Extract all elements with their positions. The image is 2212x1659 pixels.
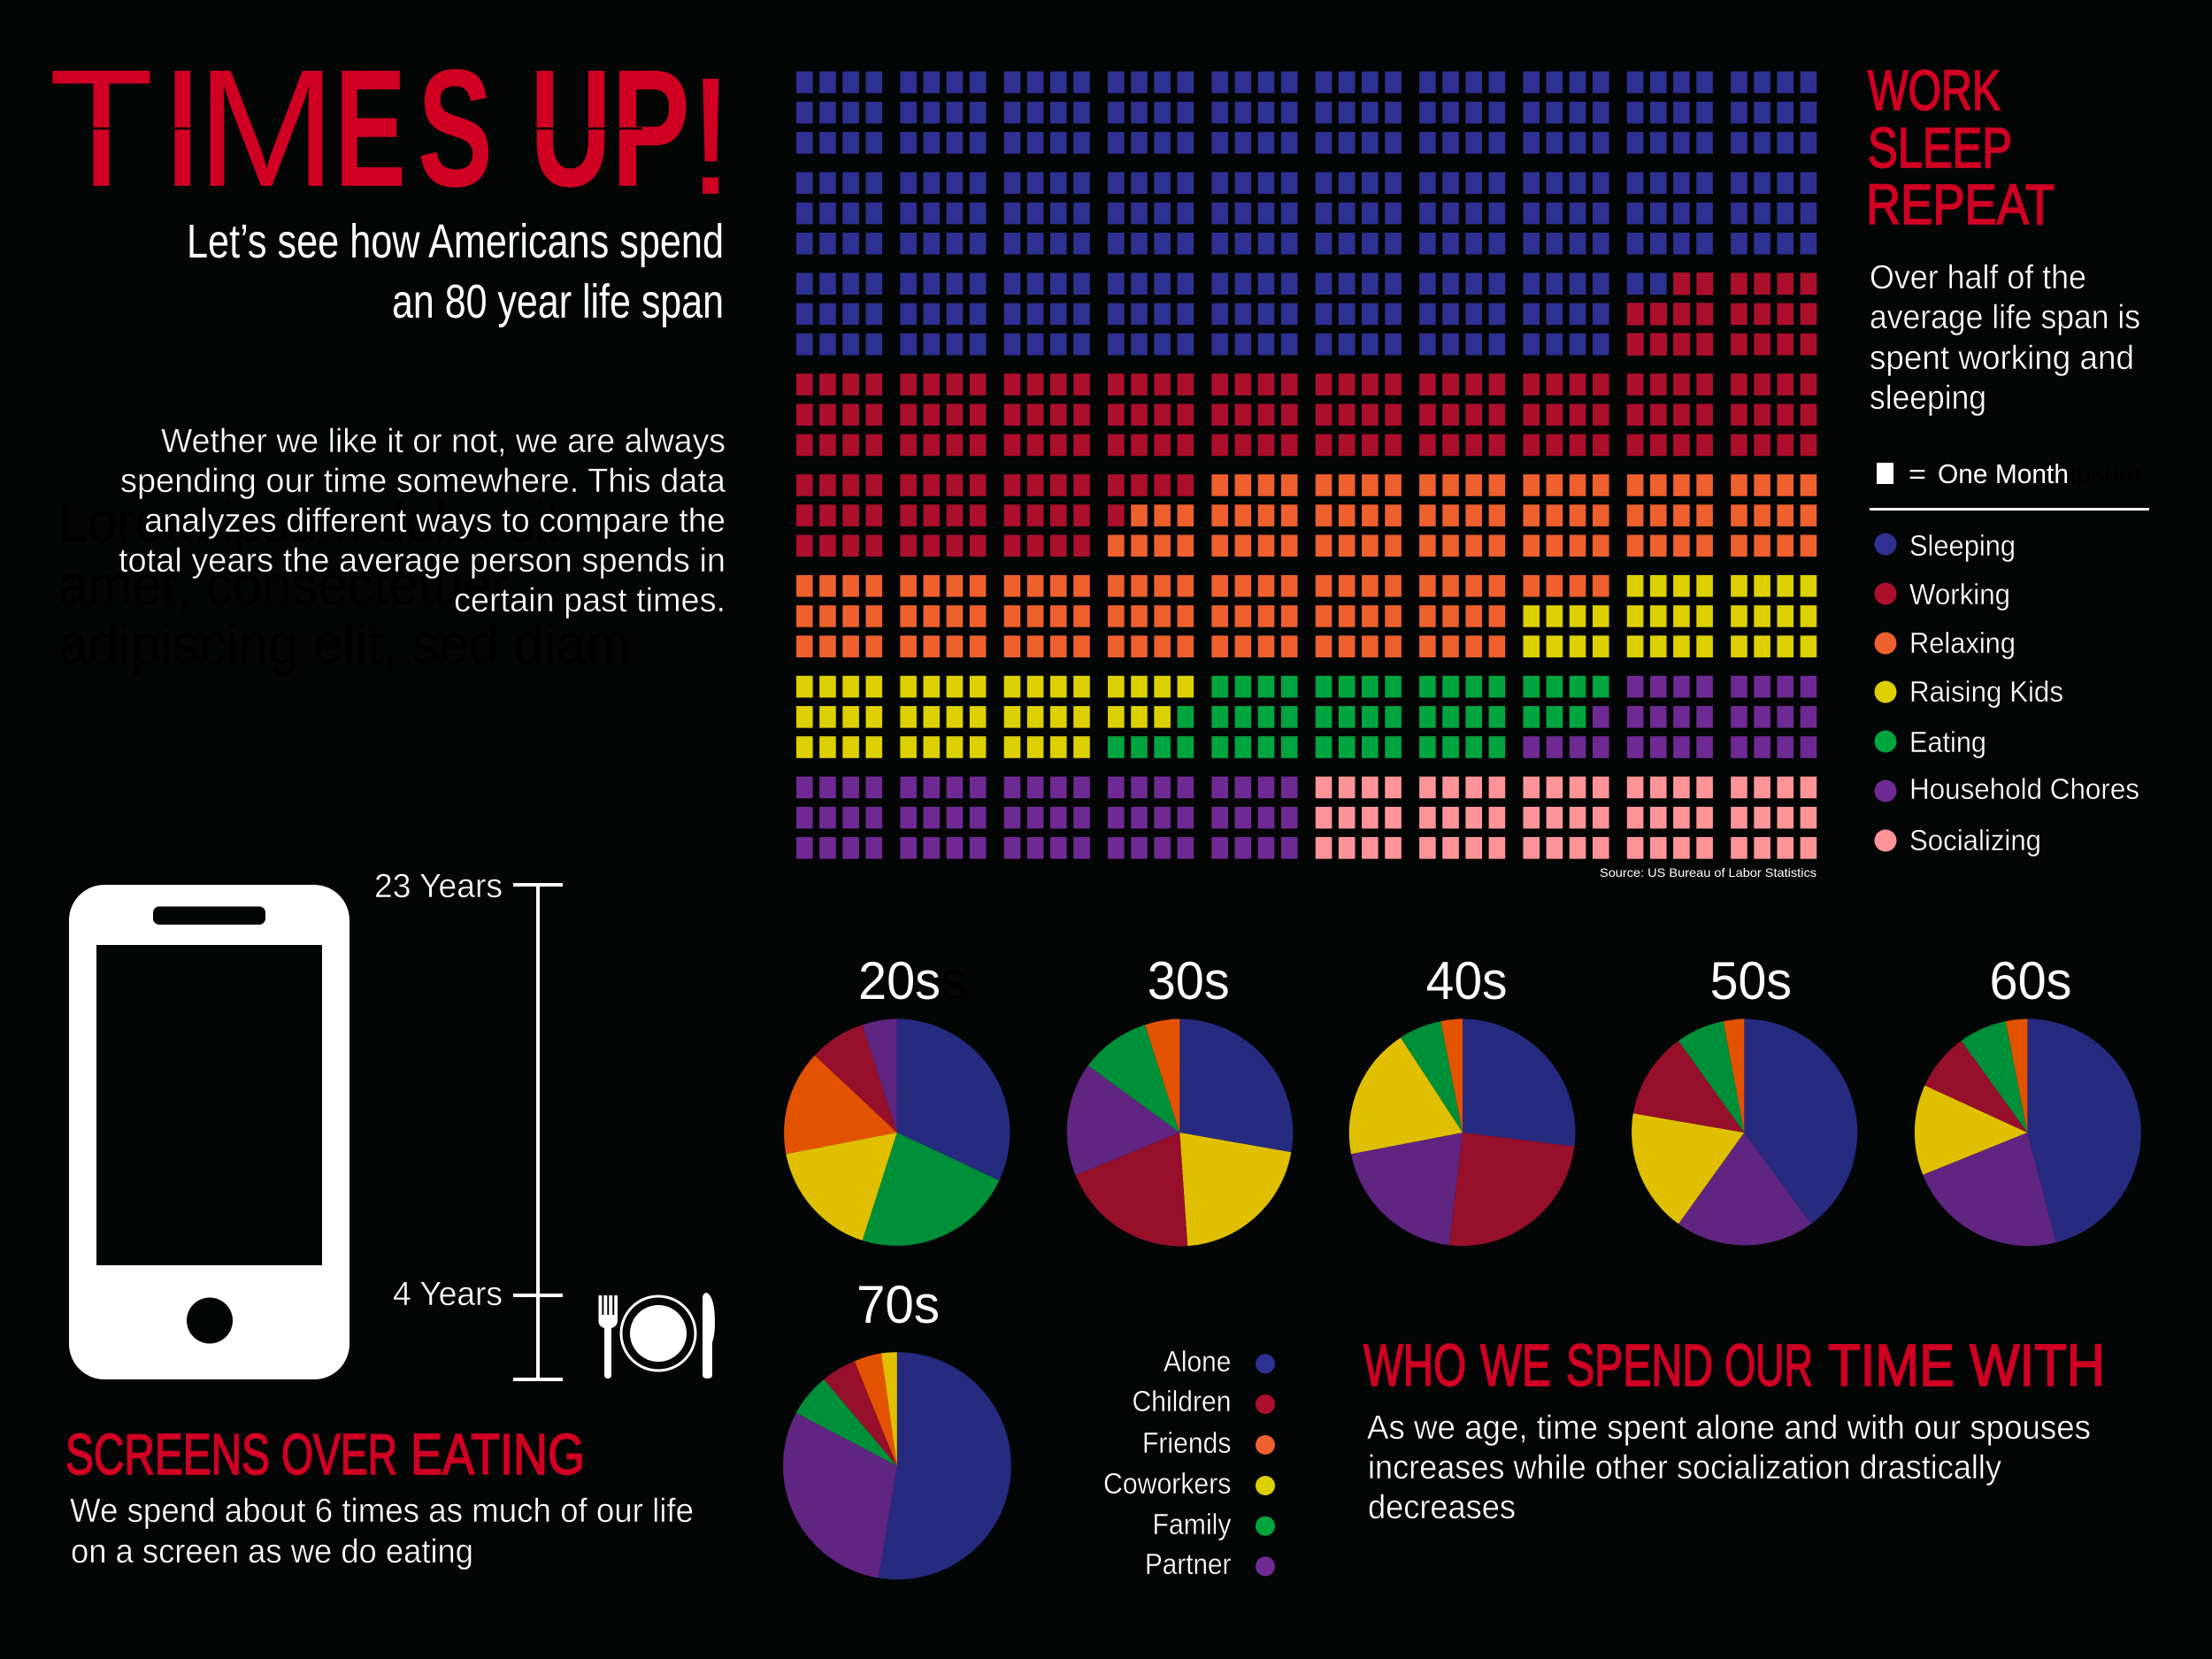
heading: work sleep repeat: WORK	[1868, 58, 2001, 122]
unit key: one month: =	[1909, 458, 1926, 489]
heading: screens over eating: OVER	[281, 1422, 397, 1486]
waffle chart: 80 years in months	[796, 72, 1816, 859]
heading: who we spend our time with: TIME	[1828, 1333, 1955, 1399]
heading: work sleep repeat: REPEAT	[1866, 173, 2055, 236]
work sleep repeat text: sleeping	[1870, 380, 1986, 417]
ghost placeholder text: Lorem ipsum dolor sit	[58, 490, 560, 554]
pie chart: 60s	[1915, 951, 2141, 1246]
screens over eating text: on a screen as we do eating	[71, 1533, 473, 1571]
heading: who we spend our time with: SPEND	[1566, 1333, 1713, 1399]
heading: who we spend our time with: WE	[1480, 1333, 1551, 1399]
legend: activities: Household Chores	[1909, 772, 2139, 805]
subtitle: Let’s see how Americans spend	[187, 215, 724, 268]
legend: people: Family	[1152, 1508, 1232, 1540]
heading: screens over eating	[65, 1422, 585, 1486]
title: P	[611, 35, 690, 222]
pie chart: 50s	[1632, 951, 1857, 1245]
heading: work sleep repeat	[1866, 58, 2055, 236]
legend: people	[1103, 1345, 1275, 1580]
pie chart: 40s: 40s	[1426, 951, 1508, 1010]
pie chart: 20s: s	[941, 951, 967, 1010]
who we spend time with text: As we age, time spent alone and with our spouses	[1367, 1409, 2091, 1447]
pie chart: 30s: 30s	[1148, 951, 1230, 1010]
title: U	[530, 35, 611, 222]
pie chart: 50s: 50s	[1710, 951, 1792, 1010]
title: S	[418, 35, 493, 222]
source note: Source: US Bureau of Labor Statistics	[1600, 865, 1816, 879]
work sleep repeat text	[1870, 259, 2140, 417]
intro paragraph: analyzes different ways to compare the	[144, 503, 726, 540]
scale bar: screen vs eating years: 4 Years	[393, 1276, 503, 1313]
legend: activities: Relaxing	[1909, 626, 2016, 659]
pie chart: 30s	[1067, 951, 1293, 1247]
pie chart: 20s	[784, 951, 1010, 1246]
eating cells	[1108, 676, 1609, 758]
legend: people: Coworkers	[1103, 1467, 1231, 1500]
pie chart: 20s: 20s	[858, 951, 941, 1010]
subtitle: an 80 year life span	[392, 275, 724, 328]
legend: activities: Eating	[1909, 726, 1986, 758]
title: M	[196, 35, 336, 222]
working cells	[796, 273, 1816, 557]
legend: activities: Working	[1909, 578, 2010, 611]
who we spend time with text: increases while other socialization drastically	[1368, 1449, 2001, 1486]
legend: activities: Sleeping	[1909, 529, 2016, 562]
heading: who we spend our time with: WITH	[1970, 1333, 2105, 1399]
work sleep repeat text: Over half of the	[1870, 259, 2086, 296]
unit key: one month: One Month	[1938, 458, 2069, 489]
heading: screens over eating: EATING	[411, 1422, 585, 1486]
title: !	[687, 43, 734, 230]
screens over eating text	[70, 1493, 694, 1571]
title: T	[49, 35, 154, 222]
heading: who we spend our time with: WHO	[1363, 1333, 1466, 1399]
pie chart: 60s: 60s	[1989, 951, 2072, 1010]
sleeping cells	[796, 72, 1816, 355]
legend: activities: Socializing	[1909, 824, 2041, 856]
intro paragraph	[119, 423, 726, 619]
who we spend time with text: decreases	[1368, 1489, 1516, 1526]
scale bar: screen vs eating years	[374, 868, 563, 1381]
icon: smartphone	[69, 885, 349, 1379]
legend: activities	[1874, 529, 2139, 856]
heading: who we spend our time with	[1363, 1333, 2105, 1399]
title: E	[334, 35, 406, 222]
title	[49, 35, 734, 230]
pie chart: 70s: 70s	[856, 1275, 940, 1334]
scale bar: screen vs eating years: 23 Years	[374, 868, 503, 905]
heading: screens over eating: SCREENS	[65, 1422, 270, 1486]
unit key: one month	[1870, 458, 2149, 511]
pie chart: 40s	[1349, 951, 1575, 1246]
raising kids cells	[796, 575, 1816, 758]
relaxing cells	[796, 474, 1816, 657]
intro paragraph: total years the average person spends in	[119, 542, 726, 580]
intro paragraph: Wether we like it or not, we are always	[161, 423, 726, 460]
work sleep repeat text: average life span is	[1870, 299, 2140, 336]
icon: plate and cutlery	[598, 1293, 715, 1379]
socializing cells	[1316, 777, 1816, 859]
title: I	[159, 35, 205, 222]
intro paragraph: certain past times.	[454, 582, 726, 619]
intro paragraph: spending our time somewhere. This data	[120, 463, 726, 500]
legend: people: Children	[1133, 1385, 1232, 1417]
unit key: one month: ipsum	[2070, 458, 2141, 489]
legend: people: Alone	[1164, 1345, 1231, 1378]
screens over eating text: We spend about 6 times as much of our life	[70, 1493, 694, 1530]
legend: activities: Raising Kids	[1909, 675, 2063, 708]
pie chart: 70s	[783, 1275, 1011, 1579]
who we spend time with text	[1367, 1409, 2091, 1526]
household chores cells	[796, 676, 1816, 859]
heading: work sleep repeat: SLEEP	[1868, 116, 2012, 180]
heading: who we spend our time with: OUR	[1724, 1333, 1813, 1399]
subtitle	[187, 215, 724, 328]
ghost placeholder text: amet, consectetuer	[58, 553, 510, 617]
legend: people: Partner	[1145, 1548, 1231, 1580]
legend: people: Friends	[1142, 1426, 1231, 1459]
ghost placeholder text: adipiscing elit, sed diam	[58, 612, 631, 676]
work sleep repeat text: spent working and	[1870, 340, 2134, 377]
ghost placeholder text	[58, 490, 631, 676]
